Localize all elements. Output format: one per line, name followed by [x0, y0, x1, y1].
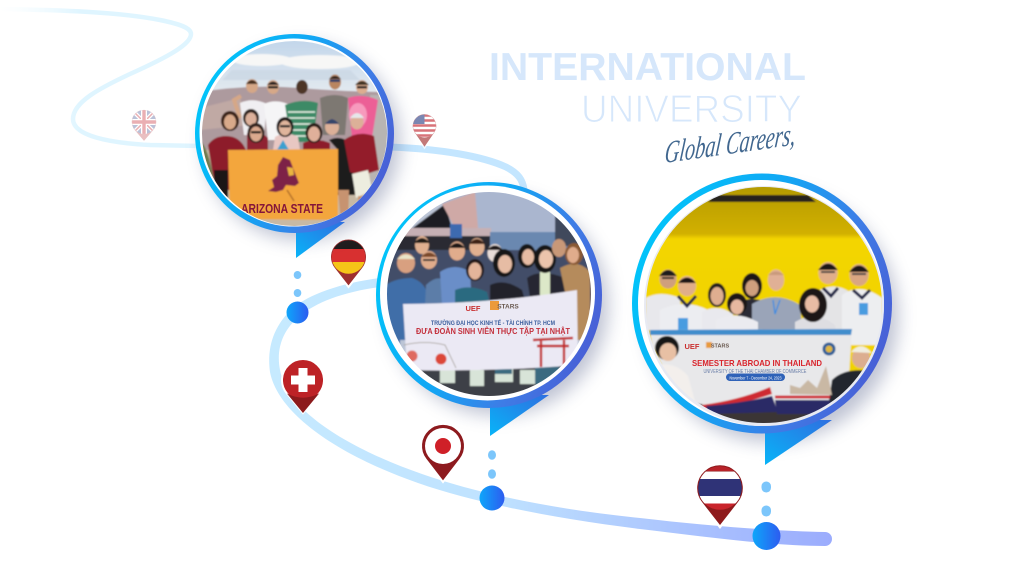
heading: university: UNIVERSITY — [581, 88, 802, 131]
thai flag swoosh — [702, 402, 777, 407]
photo: group at the airport — [385, 190, 595, 400]
flag: Arizona State — [228, 149, 338, 220]
banner logo: UEF — [466, 304, 481, 313]
banner title: SEMESTER ABROAD IN THAILAND — [692, 358, 822, 368]
pin: Germany — [330, 238, 368, 287]
connector dots stop 1 — [294, 271, 301, 297]
photo: group at the airport: STARS — [497, 304, 519, 310]
banner — [650, 329, 852, 404]
floor and shoes — [420, 366, 562, 396]
ceiling bar — [708, 195, 816, 202]
pin: United Kingdom — [131, 109, 157, 142]
seated right person — [828, 369, 862, 403]
title block — [489, 46, 806, 170]
japan disc — [425, 428, 461, 464]
pin: Thailand — [696, 464, 744, 527]
tagline: global careers: Global Careers, — [663, 116, 798, 170]
back row — [240, 100, 267, 135]
stop markers: dots — [286, 271, 780, 550]
banner date pill: November 7 - December 24, 2023 — [730, 375, 782, 380]
node stop 2 — [480, 486, 504, 510]
skyline — [790, 366, 832, 395]
torsos — [387, 277, 426, 341]
pin: Switzerland — [282, 359, 324, 413]
front row — [208, 136, 246, 190]
connector dots stop 2 — [488, 450, 496, 479]
torsos back — [646, 294, 682, 330]
banner subtitle: UNIVERSITY OF THE THAI CHAMBER OF COMMERCE — [704, 369, 807, 375]
photo: group in front of a yellow wall — [640, 185, 890, 430]
pin: United States — [412, 113, 438, 148]
banner text: TRƯỜNG ĐẠI HỌC KINH TẾ - TÀI CHÍNH TP. HCM — [431, 319, 555, 327]
torii gate — [533, 338, 573, 367]
pin: Japan — [421, 424, 465, 482]
bubble pointer — [765, 420, 832, 465]
bubble pointer — [296, 222, 345, 258]
flag text: ARIZONA STATE — [241, 202, 323, 216]
route segment between first and second stop — [390, 147, 524, 190]
faded route from the top left — [0, 9, 200, 146]
banner — [403, 290, 578, 370]
panel: Japan internship photo bubble — [376, 182, 608, 436]
banner headline: ĐƯA ĐOÀN SINH VIÊN THỰC TẬP TẠI NHẬT — [416, 327, 570, 336]
heads — [415, 236, 429, 254]
arm — [234, 96, 241, 118]
photo: group in front of a yellow wall: STARS — [711, 344, 729, 350]
node stop 3 — [752, 522, 780, 550]
photo: group at the Grand Canyon — [200, 40, 390, 230]
logos — [822, 342, 836, 356]
bubble pointer — [490, 395, 549, 436]
seated left person — [662, 364, 694, 400]
panel: Thailand semester photo bubble — [632, 174, 898, 465]
connector dots stop 3 — [762, 482, 771, 516]
swiss cross — [291, 368, 315, 392]
main route band — [269, 278, 832, 546]
heading: international: INTERNATIONAL — [489, 46, 806, 89]
heads back — [660, 270, 676, 288]
banner date pill — [726, 374, 785, 381]
node stop 1 — [286, 302, 308, 324]
panel: Arizona State photo bubble — [195, 34, 400, 258]
banner logo text: UEF — [684, 342, 700, 351]
